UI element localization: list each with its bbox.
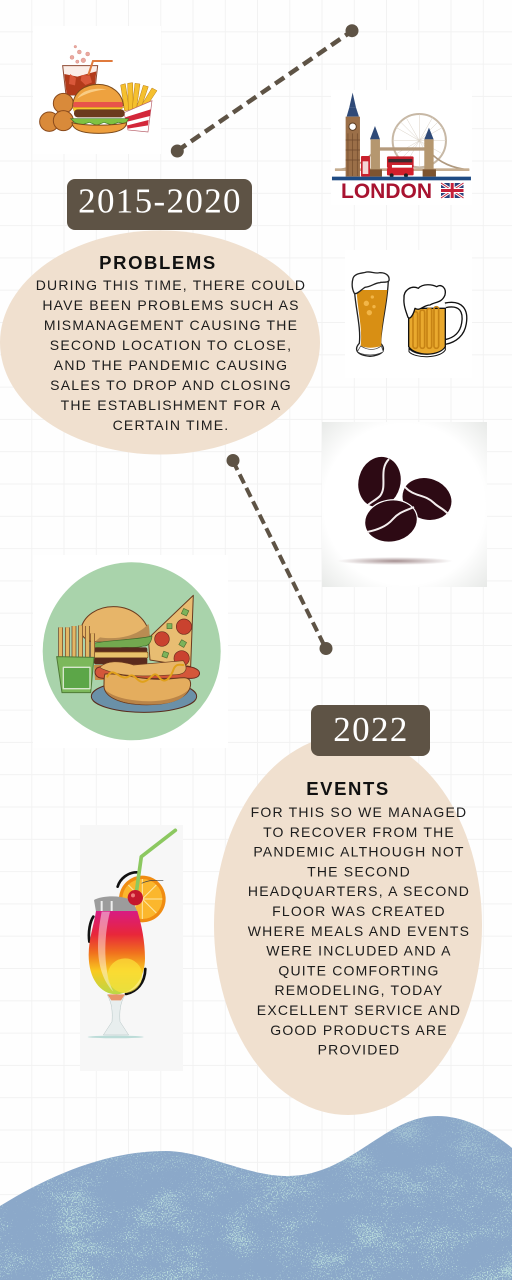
icon: cocktail glass: [80, 825, 183, 1071]
text block: events description: QUITE COMFORTING: [278, 962, 440, 978]
text block: events description: WHERE MEALS AND EVENTS: [248, 923, 470, 939]
text block: events description: PROVIDED: [318, 1042, 400, 1058]
text block: events description: REMODELING, TODAY: [274, 982, 444, 998]
wave: textured blue footer: [0, 1110, 512, 1280]
connector: top dashed line: [171, 24, 358, 158]
text block: events description: THE SECOND: [307, 863, 411, 879]
text block: events description: PANDEMIC ALTHOUGH NOT: [253, 844, 465, 860]
text block: events description: EXCELLENT SERVICE AND: [257, 1002, 461, 1018]
connector: middle dashed line: [226, 454, 332, 655]
panel: problems ellipse: [0, 230, 320, 454]
text block: events description: GOOD PRODUCTS ARE: [270, 1022, 448, 1038]
heading: events: EVENTS: [306, 778, 390, 799]
text block: problems description: AND THE PANDEMIC CAUSING: [54, 357, 288, 373]
icon: London skyline: LONDON: [341, 180, 432, 203]
text block: problems description: HAVE BEEN PROBLEMS SUCH AS: [42, 297, 300, 313]
text block: problems description: CERTAIN TIME.: [113, 417, 229, 433]
text block: events description: TO RECOVER FROM THE: [263, 824, 455, 840]
text block: problems description: SECOND LOCATION TO CLOSE,: [50, 337, 292, 353]
text block: problems description: [36, 277, 306, 433]
badge: 2022: 2022: [333, 710, 409, 749]
text block: problems description: THE ESTABLISHMENT FOR A: [61, 397, 281, 413]
text block: events description: [248, 804, 470, 1058]
icon: burger, fries, hot dog and pizza on green circle: [33, 555, 228, 748]
text block: problems description: DURING THIS TIME, THERE COULD: [36, 277, 306, 293]
badge: 2022: [311, 705, 430, 756]
badge: 2015-2020: 2015-2020: [78, 182, 242, 220]
icon: coffee beans: [322, 422, 487, 587]
panel: events ellipse: [214, 735, 482, 1115]
badge: 2015-2020: [67, 179, 252, 230]
text block: problems description: SALES TO DROP AND CLOSING: [50, 377, 292, 393]
heading: problems: PROBLEMS: [99, 252, 217, 273]
icon: beer glasses: [345, 250, 472, 378]
icon: London skyline: [331, 90, 472, 205]
text block: problems description: MISMANAGEMENT CAUSING THE: [44, 317, 298, 333]
text block: events description: FLOOR WAS CREATED: [272, 903, 446, 919]
text block: events description: HEADQUARTERS, A SECOND: [248, 883, 470, 899]
text block: events description: FOR THIS SO WE MANAGED: [251, 804, 467, 820]
icon: burger, drink and fries: [33, 26, 161, 154]
text block: events description: WERE INCLUDED AND A: [266, 943, 452, 959]
